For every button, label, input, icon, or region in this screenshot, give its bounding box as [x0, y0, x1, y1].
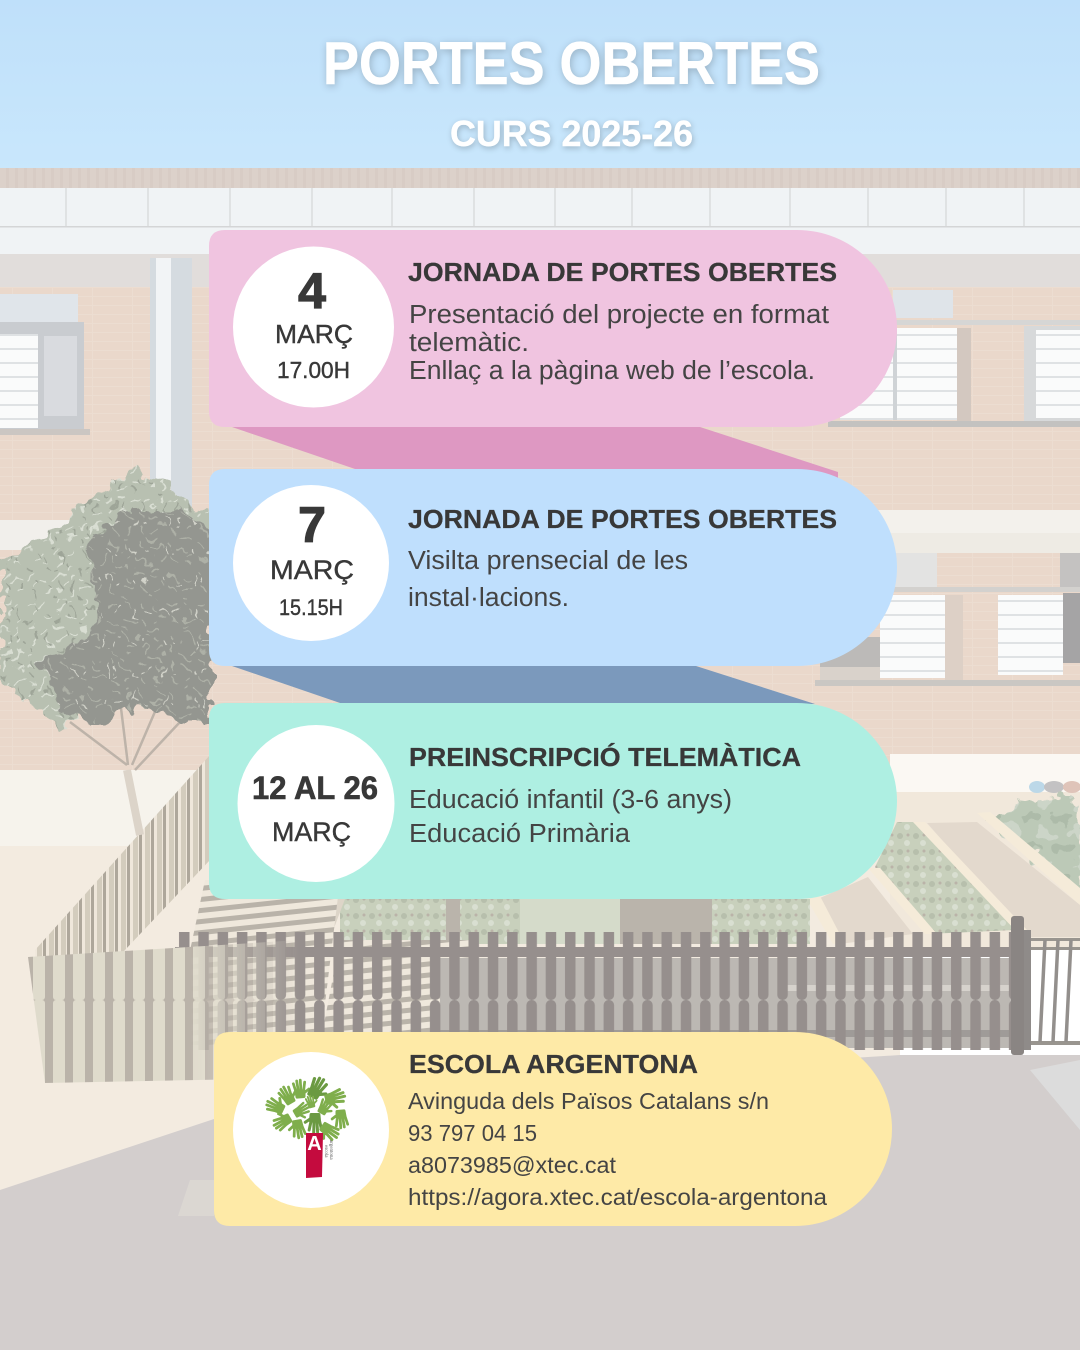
description: Enllaç a la pàgina web de l’escola.	[409, 357, 815, 385]
panel shape	[209, 469, 897, 666]
left window	[0, 294, 90, 435]
contact details: Avinguda dels Països Catalans s/n	[408, 1088, 769, 1114]
description: telemàtic.	[409, 329, 529, 357]
date badge: 4	[298, 263, 326, 319]
diagonal fence	[35, 755, 210, 1040]
white fascia	[0, 188, 1080, 287]
logo trunk: escola	[323, 1145, 328, 1158]
contact details: https://agora.xtec.cat/escola-argentona	[408, 1184, 827, 1210]
heading: ESCOLA ARGENTONA	[409, 1051, 698, 1079]
panel: 7 març	[209, 469, 897, 666]
contact details: a8073985@xtec.cat	[408, 1152, 617, 1178]
background photo: courtyard	[0, 755, 1080, 1350]
background photo: school building	[0, 0, 1080, 848]
heading: JORNADA DE PORTES OBERTES	[408, 506, 837, 534]
flower pots	[1029, 781, 1080, 793]
date badge	[233, 485, 389, 641]
description: Presentació del projecte en format	[409, 301, 829, 329]
heading: JORNADA DE PORTES OBERTES	[408, 259, 837, 287]
left white band	[0, 520, 210, 550]
description: Educació Primària	[409, 820, 631, 848]
white band and lower right windows	[815, 510, 1080, 686]
date badge: MARÇ	[275, 319, 353, 349]
date badge: MARÇ	[272, 817, 351, 847]
date badge: MARÇ	[270, 555, 354, 585]
panel: escola argentona	[214, 1032, 892, 1226]
connector: pink shadow	[232, 427, 838, 482]
school logo	[233, 1052, 389, 1208]
logo trunk	[306, 1133, 333, 1178]
heading: PREINSCRIPCIÓ TELEMÀTICA	[409, 742, 801, 772]
drain pipe	[150, 258, 192, 520]
title: PORTES OBERTES	[323, 30, 820, 97]
upper right windows	[828, 290, 1080, 427]
description: instal·lacions.	[408, 584, 569, 612]
background photo: tree	[0, 470, 212, 835]
date badge: 12 AL 26	[252, 770, 378, 806]
description	[408, 547, 688, 612]
panel shape	[214, 1032, 892, 1226]
asphalt	[0, 1055, 1080, 1350]
white wall base	[0, 754, 1080, 848]
connector: blue shadow	[232, 666, 815, 704]
subtitle: CURS 2025-26	[450, 113, 693, 154]
description	[409, 301, 829, 385]
panel: 4 març	[209, 230, 897, 427]
logo hands	[265, 1076, 348, 1144]
foliage light	[0, 470, 212, 730]
date badge: 15.15H	[279, 595, 343, 620]
foliage dark	[40, 510, 212, 725]
description	[409, 786, 732, 848]
logo trunk: A	[307, 1133, 322, 1155]
description: Visilta prensecial de les	[408, 547, 688, 575]
contact details	[408, 1088, 827, 1210]
date badge: 17.00H	[277, 357, 350, 383]
picket shadows on sand	[170, 880, 340, 1045]
date badge	[233, 246, 394, 408]
date badge: 7	[298, 497, 326, 553]
light fence	[28, 940, 300, 1083]
logo trunk: argentona	[328, 1140, 333, 1160]
panel shape	[209, 703, 897, 899]
contact details: 93 797 04 15	[408, 1120, 537, 1146]
roof tiles	[0, 168, 1080, 189]
date badge	[238, 725, 394, 882]
panel shape	[209, 230, 897, 427]
front fence	[175, 916, 1080, 1055]
vegetable beds	[316, 798, 1080, 944]
description: Educació infantil (3-6 anys)	[409, 786, 732, 814]
panel: preinscripció	[209, 703, 897, 899]
